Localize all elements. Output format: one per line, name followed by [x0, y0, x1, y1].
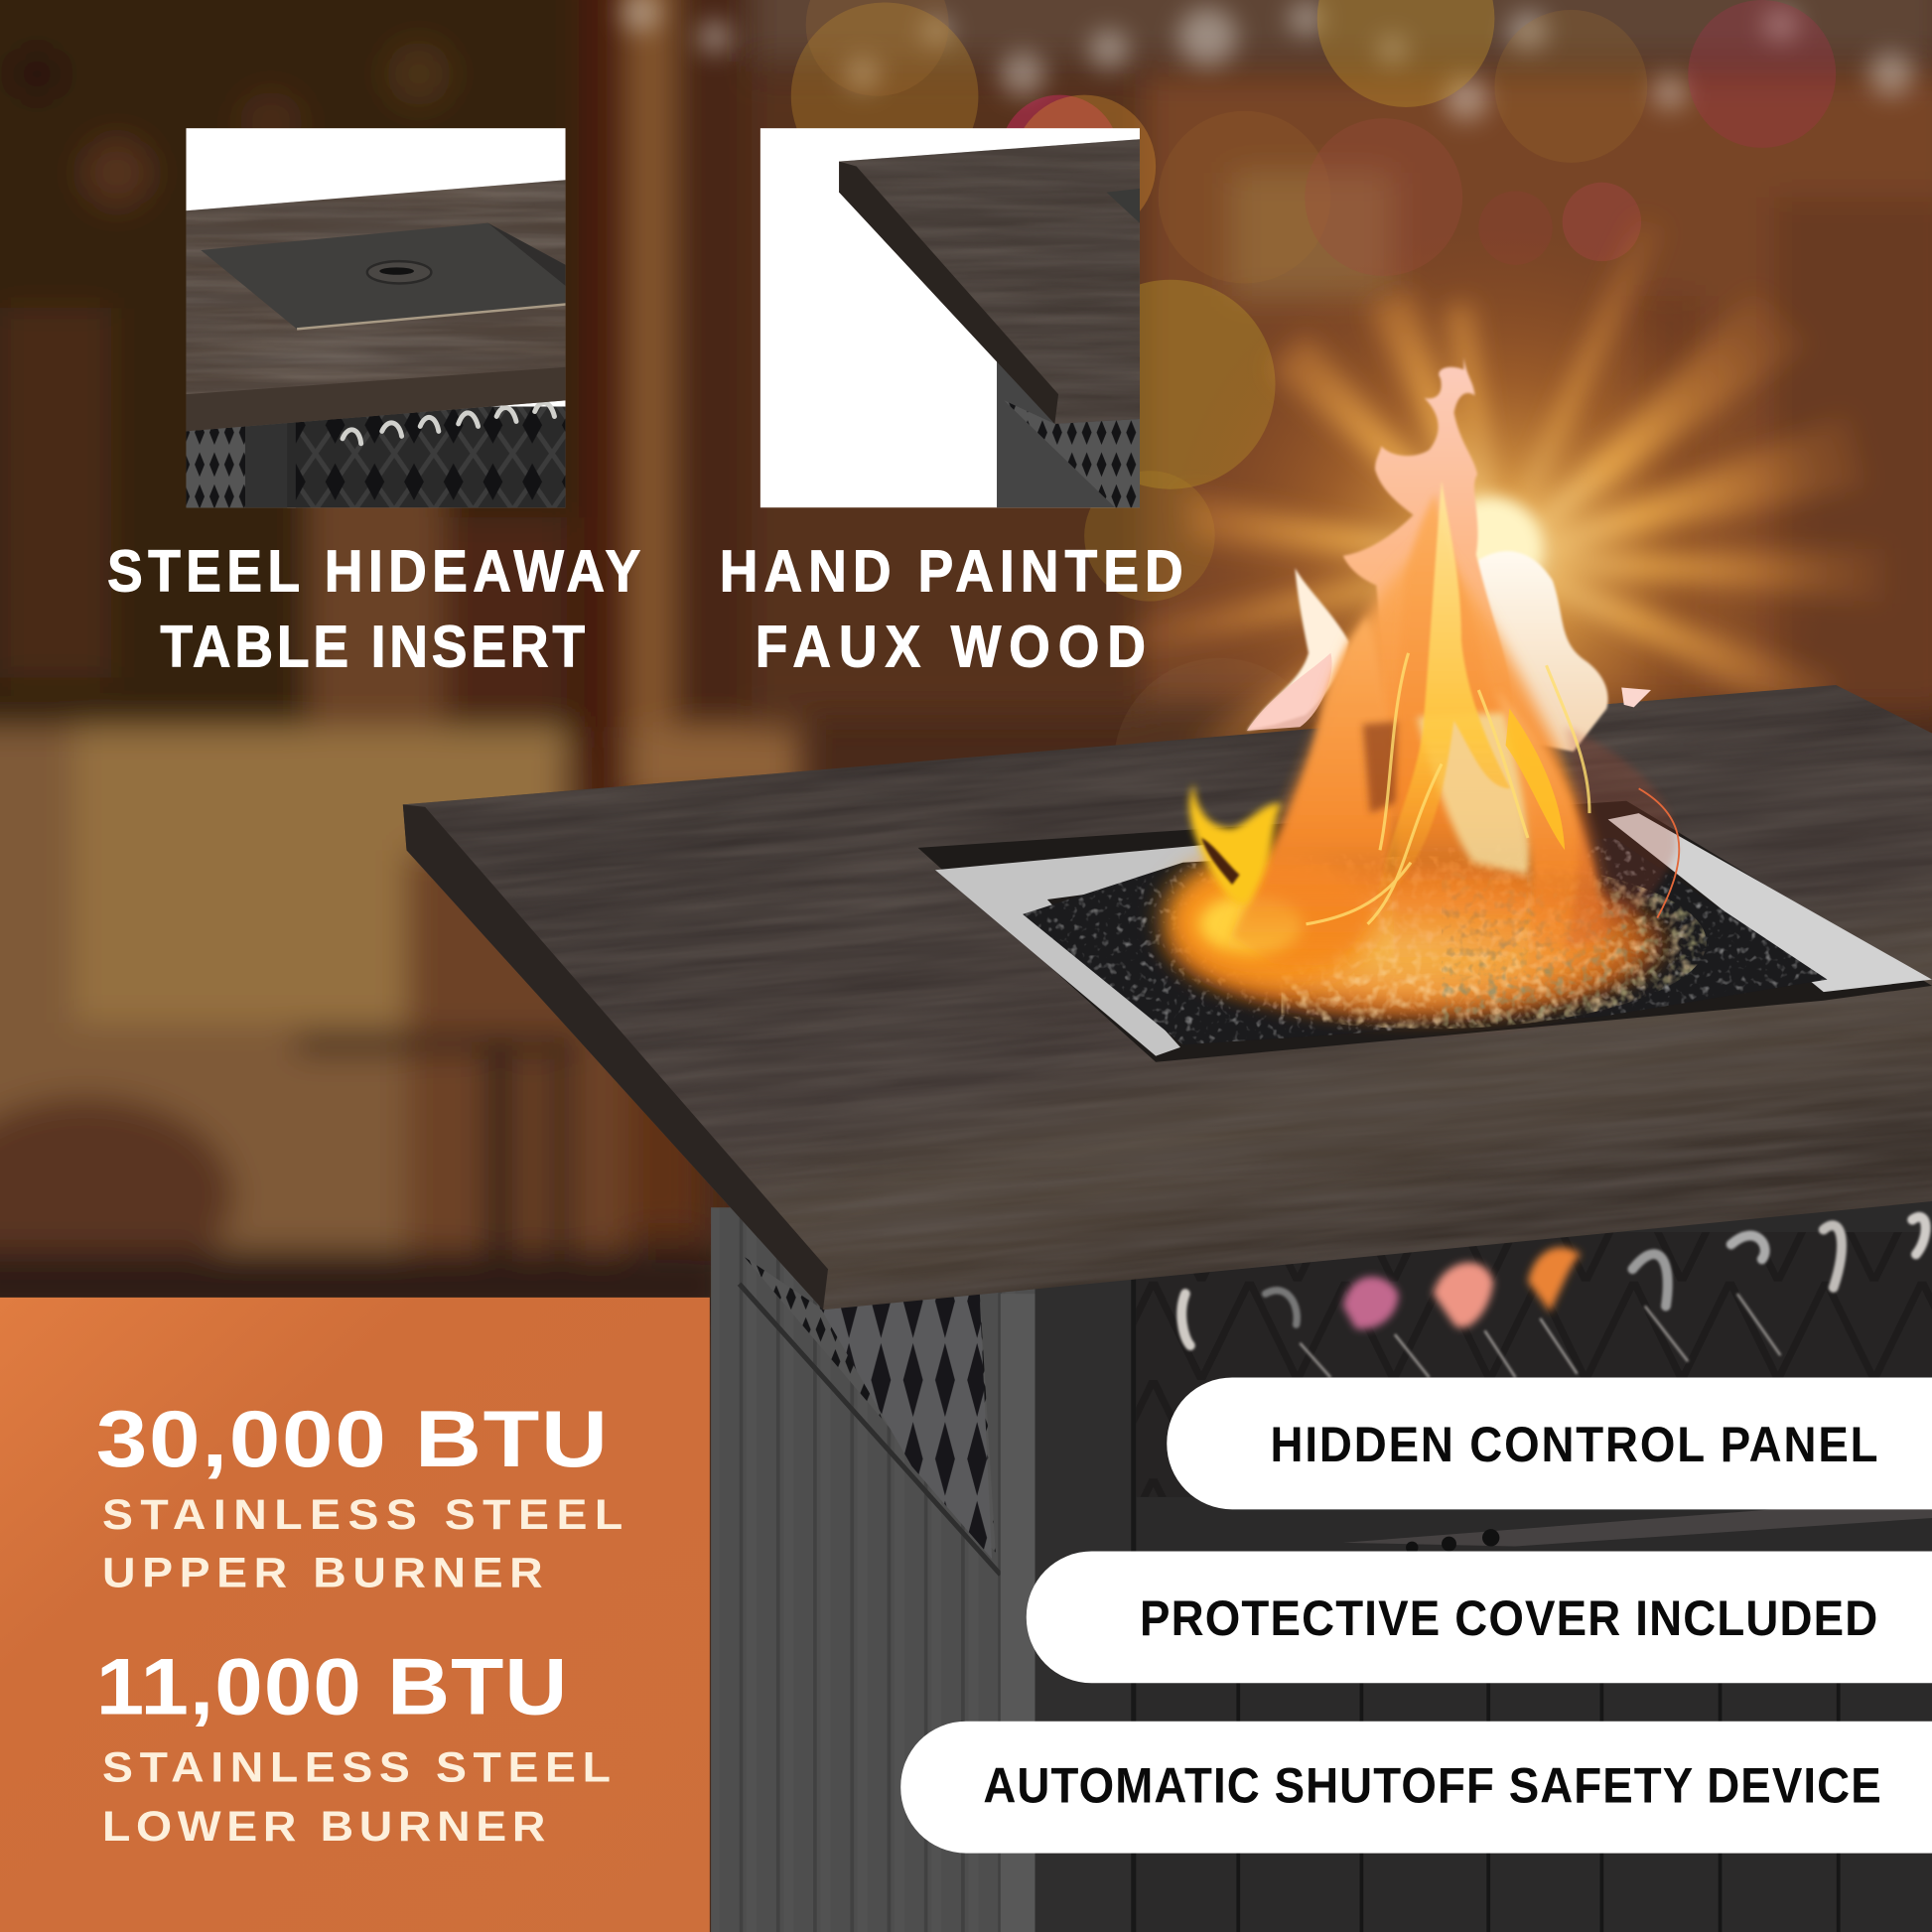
thumbnail: steel hideaway table insert	[186, 128, 566, 507]
orange burner panel	[0, 1298, 710, 1932]
upper burner rating: 30,000 BTU	[96, 1394, 608, 1484]
lower burner description: LOWER BURNER	[102, 1804, 545, 1851]
fire bed glow	[1156, 850, 1725, 1035]
caption: hand painted faux wood: FAUX WOOD	[756, 615, 1146, 680]
upper burner description	[102, 1492, 622, 1596]
lower burner description: STAINLESS STEEL	[102, 1744, 611, 1791]
white rear flame lobe	[1477, 551, 1608, 752]
yellow flame ribbons	[1379, 481, 1511, 905]
left pale tongue	[1247, 568, 1349, 731]
small detached flame tip	[1621, 688, 1651, 707]
upper burner description: UPPER BURNER	[102, 1550, 543, 1596]
right orange flame sheet	[1497, 690, 1603, 986]
orange centre flame sheet	[1392, 492, 1529, 986]
caption: hand painted faux wood: HAND PAINTED	[720, 539, 1183, 605]
caption: steel hideaway table insert: TABLE INSERT	[160, 615, 585, 680]
lower burner description	[102, 1744, 611, 1851]
caption: steel hideaway table insert	[107, 539, 640, 680]
hot left flare	[1189, 783, 1282, 904]
lattice firelight reflections	[1181, 1217, 1926, 1378]
pink tall flame	[1343, 357, 1513, 740]
lower burner rating: 11,000 BTU	[96, 1641, 567, 1731]
pill: hidden control panel: HIDDEN CONTROL PANEL	[1271, 1418, 1878, 1472]
pill: hidden control panel	[1167, 1378, 1932, 1509]
burner opening with glass rocks	[918, 801, 1932, 1062]
pill: automatic shutoff safety device	[900, 1722, 1932, 1854]
dark gap behind flames	[1363, 721, 1405, 813]
pill: protective cover included: PROTECTIVE COVER INCLUDED	[1140, 1591, 1877, 1646]
orange left flame sheet	[1232, 617, 1394, 986]
upper burner description: STAINLESS STEEL	[102, 1492, 622, 1539]
pill: protective cover included	[1027, 1552, 1932, 1683]
bokeh light circles	[791, 0, 1836, 870]
caption: hand painted faux wood	[720, 539, 1183, 680]
red wisps over right table	[1565, 727, 1676, 949]
fire pit body	[711, 1171, 1932, 1932]
broad orange flame mass	[1213, 542, 1616, 973]
pale table-line flame section	[1417, 712, 1533, 875]
thumbnail: hand painted faux wood	[760, 128, 1140, 507]
fine flame strokes	[1307, 653, 1589, 924]
flames	[1189, 357, 1679, 986]
firelight rays	[1128, 215, 1885, 894]
caption: steel hideaway table insert: STEEL HIDEAWAY	[107, 539, 640, 605]
table top wood surface	[403, 685, 1932, 1311]
pill: automatic shutoff safety device: AUTOMATIC SHUTOFF SAFETY DEVICE	[983, 1759, 1881, 1814]
